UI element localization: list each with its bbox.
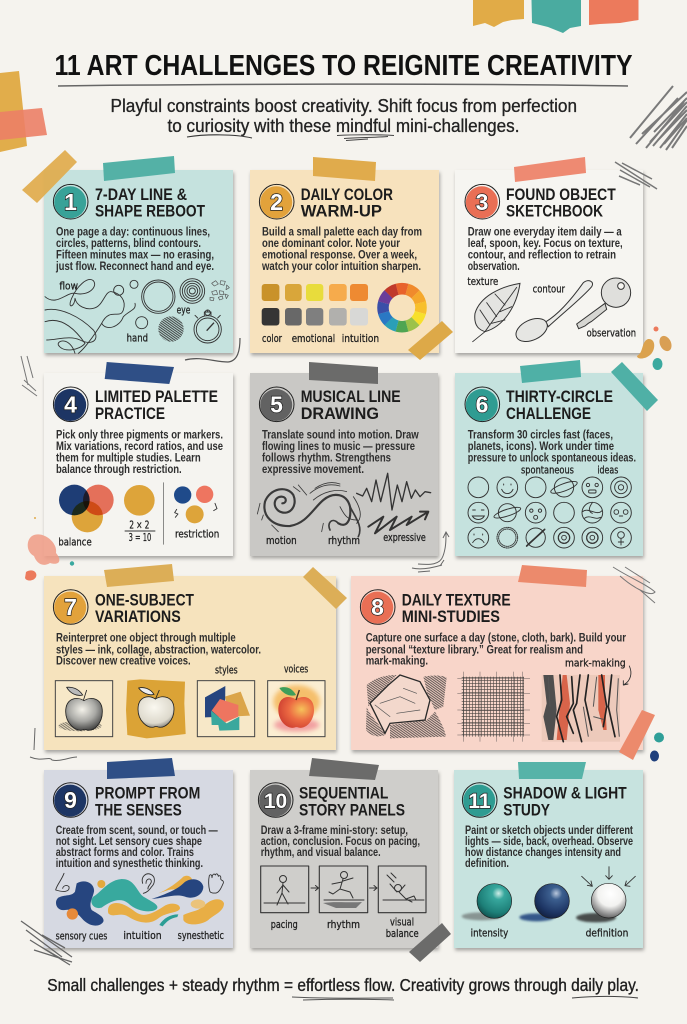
card [454, 770, 643, 948]
body text: pressure to unlock spontaneous ideas. [468, 452, 636, 465]
number badge: 6 [476, 392, 488, 418]
body text [261, 226, 422, 273]
body text: expressive movement. [262, 463, 364, 476]
tape [104, 564, 174, 587]
heading: SHAPE REBOOT [95, 202, 205, 221]
panel 4: limited palette practice [44, 362, 233, 556]
tape [309, 758, 379, 780]
pencil scribble bottom left [21, 921, 72, 965]
sketches: leaf, spoon, key [467, 275, 636, 346]
tape [518, 762, 586, 779]
body text: Mix variations, record ratios, and use [56, 440, 223, 453]
labels [266, 532, 426, 547]
number badge [53, 783, 88, 817]
sketches: leaf, spoon, key: texture [467, 275, 498, 288]
body text [56, 429, 223, 476]
abstract sensory shapes: sensory cues [56, 929, 108, 942]
heading: STORY PANELS [299, 800, 405, 819]
body text [56, 824, 218, 870]
labels: balance [386, 928, 419, 940]
body text: follows rhythm. Strengthens [262, 452, 391, 465]
sketches: leaf, spoon, key: contour [533, 282, 565, 295]
doodles: hand [127, 332, 148, 345]
card [455, 373, 643, 556]
card [44, 170, 233, 353]
body text: One page a day: continuous lines, [56, 226, 210, 239]
heading [95, 185, 205, 221]
heading: THIRTY-CIRCLE [506, 387, 613, 406]
tape [105, 362, 174, 384]
body text: Draw one everyday item daily — a [468, 226, 622, 239]
heading: LIMITED PALETTE [95, 387, 218, 406]
heading: SEQUENTIAL [299, 784, 388, 803]
heading [95, 387, 218, 423]
panel 7: one-subject variations [44, 564, 347, 750]
body text: action, conclusion. Focus on pacing, [261, 835, 420, 848]
body text [366, 632, 626, 668]
panel 5: musical line drawing [250, 362, 438, 556]
body text [56, 632, 261, 668]
labels: visual [390, 917, 414, 929]
heading [95, 784, 200, 819]
number badge: 8 [371, 594, 384, 620]
card [455, 170, 643, 353]
body text: styles — ink, collage, abstraction, watercolor. [56, 643, 261, 656]
number badge: 9 [64, 787, 77, 813]
four apple variations: styles [215, 663, 238, 676]
body text: just flow. Reconnect hand and eye. [55, 260, 214, 273]
diagonal tape [619, 710, 655, 760]
body text: Fifteen minutes max — no erasing, [56, 249, 214, 262]
card [250, 373, 438, 556]
card [351, 576, 643, 750]
pencil scribble near panel 8 [613, 567, 655, 603]
heading: ONE-SUBJECT [95, 590, 194, 609]
body text [468, 226, 623, 273]
pigment mixing: restriction [175, 528, 219, 541]
subtitle: Playful constraints boost creativity. Shift focus from perfection [110, 96, 577, 116]
heading: DAILY TEXTURE [402, 590, 511, 609]
body text: Draw a 3-frame mini-story: setup, [261, 824, 408, 837]
heading [299, 784, 405, 819]
labels [262, 333, 379, 345]
number badge: 1 [64, 189, 77, 215]
body text: flowing lines to music — pressure [262, 440, 415, 453]
number badge [465, 387, 500, 422]
body text [468, 429, 636, 465]
body text: planets, icons). Work under time [468, 440, 614, 453]
labels: pacing [271, 919, 298, 931]
three shaded spheres [462, 867, 635, 940]
body text: one dominant color. Note your [262, 237, 400, 250]
diagonal tape [22, 150, 77, 203]
four apple variations [55, 663, 325, 738]
body text: how distance changes intensity and [465, 846, 621, 859]
three shaded spheres: intensity [471, 927, 508, 940]
body text: Discover new creative voices. [56, 655, 191, 668]
doodles [45, 279, 229, 353]
subtitle: to curiosity with these mindful mini-challenges. [168, 116, 520, 136]
body text: lights — side, back, overhead. Observe [465, 835, 633, 848]
tape [107, 758, 175, 779]
number badge: 10 [264, 790, 287, 813]
circle grid: ideas [597, 463, 619, 476]
labels: color [262, 333, 283, 345]
tape [103, 156, 175, 181]
number badge [462, 783, 497, 817]
stone, cloth and bark studies [366, 657, 631, 742]
heading [506, 185, 616, 221]
number badge [53, 387, 88, 422]
diagonal tape [408, 321, 453, 360]
body text: Transform 30 circles fast (faces, [468, 429, 613, 442]
arrow between panel 5 and 6 [418, 532, 449, 564]
sketches: leaf, spoon, key: observation [587, 327, 636, 340]
tape [518, 565, 587, 587]
heading: WARM-UP [301, 202, 382, 221]
three story frames [261, 866, 426, 913]
panel 8: daily texture mini-studies [351, 565, 655, 760]
squiggle below panel 1 [185, 338, 240, 362]
heading: PRACTICE [95, 404, 165, 423]
body text: Translate sound into motion. Draw [262, 429, 419, 442]
decorative tapes at left [0, 71, 47, 152]
body text: Capture one surface a day (stone, cloth, bark). Build your [366, 632, 626, 645]
heading: FOUND OBJECT [506, 185, 616, 204]
number badge: 2 [270, 189, 283, 215]
heading [402, 590, 511, 626]
panel 10: sequential story panels [250, 758, 451, 962]
paint swatches [262, 284, 368, 326]
diagonal tape [409, 923, 451, 962]
pigment mixing [58, 483, 219, 549]
tape [309, 362, 378, 384]
number badge: 7 [64, 594, 77, 620]
body text: balance through restriction. [56, 463, 182, 476]
heading: DAILY COLOR [301, 185, 393, 204]
body text: definition. [465, 857, 509, 870]
heading [95, 590, 194, 626]
doodles: eye [177, 303, 190, 316]
body text: contour, and reflection to retrain [468, 249, 616, 262]
body text: circles, patterns, blind contours. [56, 237, 201, 250]
number badge [53, 590, 88, 624]
number badge: 11 [468, 790, 491, 813]
body text: personal “texture library.” Great for realism and [366, 643, 583, 656]
diagonal tape [303, 567, 347, 609]
body text: Create from scent, sound, or touch — [56, 824, 218, 837]
labels: rhythm [327, 919, 360, 931]
labels: expressive [383, 532, 426, 544]
spiral and sound wave [257, 483, 360, 537]
number badge [259, 387, 294, 422]
pigment mixing: 3 = 10 [129, 531, 151, 544]
heading: 7-DAY LINE & [95, 185, 187, 204]
body text: observation. [468, 260, 520, 273]
paint splatter right [619, 326, 674, 370]
labels: rhythm [328, 535, 360, 547]
body text: Paint or sketch objects under different [465, 824, 633, 837]
heading: VARIATIONS [95, 607, 181, 626]
color wheel [375, 281, 429, 335]
heading: SHADOW & LIGHT [503, 784, 627, 803]
stone, cloth and bark studies: mark-making [565, 657, 626, 670]
circle grid [468, 463, 631, 548]
body text: Build a small palette each day from [262, 226, 422, 239]
pencil scribble near panel 3 [615, 162, 657, 189]
body text [261, 824, 420, 859]
labels: motion [266, 535, 297, 547]
labels: intuition [342, 333, 379, 345]
body text: them for multiple studies. Learn [56, 452, 201, 465]
body text: watch your color intuition sharpen. [261, 260, 421, 273]
panel 11: shadow and light study [454, 762, 643, 948]
squiggle below panel 5 [412, 560, 444, 572]
number badge [360, 590, 395, 624]
tape [514, 157, 586, 182]
doodles: flow [59, 279, 78, 292]
heading: MINI-STUDIES [402, 607, 500, 626]
three shaded spheres: definition [586, 927, 628, 940]
circle grid: spontaneous [521, 463, 574, 476]
tape [313, 157, 376, 181]
card [44, 576, 336, 750]
heading: STUDY [503, 800, 551, 819]
card [250, 770, 438, 948]
body text: emotional response. Over a week, [262, 249, 417, 262]
abstract sensory shapes: intuition [123, 929, 162, 942]
number badge: 5 [270, 392, 283, 418]
labels [271, 917, 419, 940]
card [44, 373, 233, 556]
body text: mark-making. [366, 655, 428, 668]
heading: CHALLENGE [506, 404, 591, 423]
body text [465, 824, 633, 870]
number badge [259, 184, 294, 219]
diagonal tape [611, 362, 658, 411]
pencil scribble left [21, 356, 37, 396]
heading: MUSICAL LINE [301, 387, 401, 406]
heading [506, 387, 613, 423]
body text [262, 429, 419, 476]
wave and arrow [340, 473, 431, 533]
heading: SKETCHBOOK [506, 202, 604, 221]
body text: Reinterpret one object through multiple [56, 632, 236, 645]
heading: PROMPT FROM [95, 784, 200, 803]
heading: DRAWING [301, 404, 379, 423]
coral watercolor splash left [25, 517, 74, 580]
squiggle left of row three [30, 728, 77, 760]
body text: rhythm, and visual balance. [261, 846, 381, 859]
abstract sensory shapes [56, 873, 224, 942]
pigment mixing: balance [58, 536, 92, 549]
panel 3: found object sketchbook [455, 157, 643, 353]
panel 2: daily color warm-up [250, 157, 453, 360]
heading: THE SENSES [95, 800, 182, 819]
body text: intuition and synesthetic thinking. [56, 857, 203, 870]
panel 9: prompt from the senses [44, 758, 233, 948]
decorative tapes at top [473, 0, 638, 33]
number badge: 4 [64, 392, 77, 418]
panel 1: line and shape reboot [22, 150, 233, 353]
body text: not sight. Let sensory cues shape [56, 835, 202, 848]
title underline [58, 84, 628, 86]
heading [301, 185, 393, 221]
heading [503, 784, 627, 819]
pencil scribble right [630, 86, 687, 150]
body text [55, 226, 214, 273]
body text: abstract forms and color. Trains [56, 846, 194, 859]
panel 6: thirty-circle challenge [455, 360, 658, 556]
card [250, 170, 439, 353]
number badge [465, 184, 500, 219]
tape [520, 360, 581, 383]
body text: leaf, spoon, key. Focus on texture, [468, 237, 623, 250]
number badge [258, 783, 293, 817]
paint dots [650, 732, 664, 762]
number badge: 3 [476, 189, 488, 215]
four apple variations: voices [284, 663, 309, 676]
abstract sensory shapes: synesthetic [178, 929, 224, 942]
pigment mixing: 2 × 2 [129, 518, 149, 531]
number badge [53, 184, 88, 219]
subtitle [110, 96, 577, 140]
labels: emotional [292, 333, 335, 345]
heading [301, 387, 401, 423]
card [44, 770, 233, 948]
body text: Pick only three pigments or markers. [56, 429, 223, 442]
